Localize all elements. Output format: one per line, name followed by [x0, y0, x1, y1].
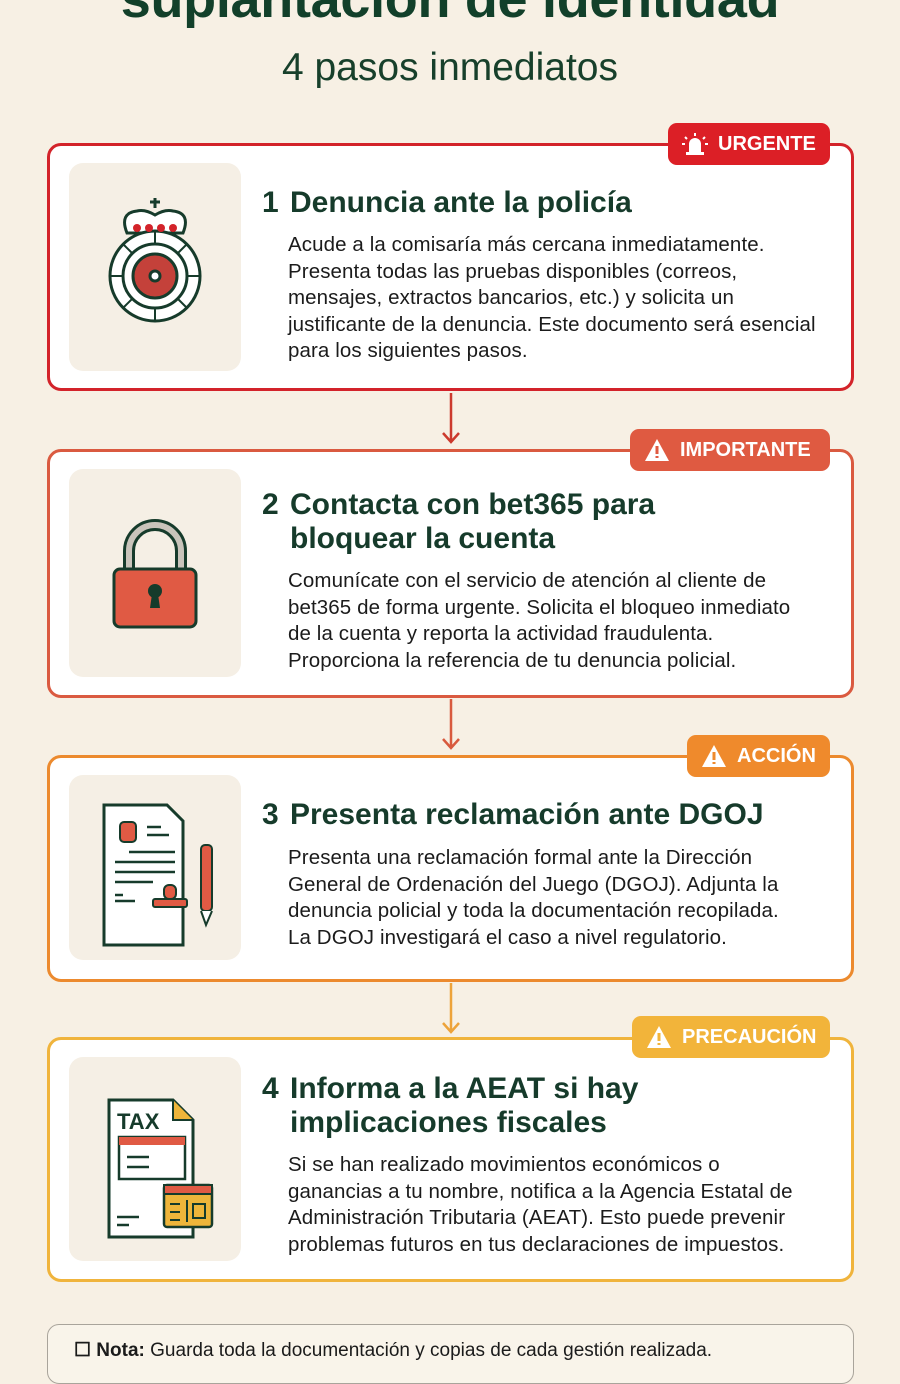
- badge: urgente: URGENTE: [718, 133, 816, 155]
- heading: 2: [262, 488, 279, 521]
- heading: implicaciones fiscales: [290, 1106, 607, 1139]
- heading: 4: [262, 1072, 279, 1105]
- panel: step 1: [47, 143, 854, 391]
- panel: step 3: [47, 755, 854, 982]
- badge: urgente: [668, 123, 830, 165]
- heading: bloquear la cuenta: [290, 522, 555, 555]
- heading: 1: [262, 186, 279, 219]
- body text: problemas futuros en tus declaraciones de impuestos.: [288, 1233, 784, 1256]
- body text: ganancias a tu nombre, notifica a la Agencia Estatal de: [288, 1180, 793, 1203]
- badge: precaucion: [632, 1016, 830, 1058]
- heading: 3: [262, 798, 279, 831]
- body text: [288, 233, 816, 362]
- body text: de la cuenta y reporta la actividad fraudulenta.: [288, 622, 713, 645]
- badge: accion: [687, 735, 830, 777]
- arrow 2: [442, 699, 460, 750]
- icon: document with stamp: [69, 775, 241, 960]
- body text: denuncia policial y toda la documentación recopilada.: [288, 899, 779, 922]
- body text: [288, 846, 779, 949]
- heading: [262, 488, 656, 555]
- icon: tax document: [69, 1057, 241, 1261]
- subtitle: 4 pasos inmediatos: [282, 46, 618, 89]
- body text: Acude a la comisaría más cercana inmediatamente.: [288, 233, 765, 256]
- body text: Comunícate con el servicio de atención al cliente de: [288, 569, 766, 592]
- panel: step 2: [47, 449, 854, 698]
- body text: Si se han realizado movimientos económicos o: [288, 1153, 720, 1176]
- icon: padlock: [69, 469, 241, 677]
- heading: Contacta con bet365 para: [290, 488, 655, 521]
- arrow 3: [442, 983, 460, 1034]
- body text: La DGOJ investigará el caso a nivel regulatorio.: [288, 926, 727, 949]
- icon: tax document: TAX: [117, 1109, 160, 1134]
- badge: importante: IMPORTANTE: [680, 439, 811, 461]
- heading: Denuncia ante la policía: [290, 186, 632, 219]
- badge: importante: [630, 429, 830, 471]
- body text: General de Ordenación del Juego (DGOJ). Adjunta la: [288, 873, 778, 896]
- body text: Proporciona la referencia de tu denuncia policial.: [288, 649, 736, 672]
- note box: [47, 1324, 854, 1384]
- heading: Informa a la AEAT si hay: [290, 1072, 638, 1105]
- badge: accion: ACCIÓN: [737, 745, 816, 767]
- body text: [288, 1153, 793, 1256]
- body text: mensajes, extractos bancarios, etc.) y solicita un: [288, 286, 734, 309]
- body text: Presenta una reclamación formal ante la Dirección: [288, 846, 752, 869]
- heading: Presenta reclamación ante DGOJ: [290, 798, 764, 831]
- heading: [262, 1072, 638, 1139]
- body text: [288, 569, 790, 672]
- body text: bet365 de forma urgente. Solicita el bloqueo inmediato: [288, 596, 790, 619]
- panel: step 4: [47, 1037, 854, 1282]
- body text: justificante de la denuncia. Este documento será esencial: [288, 313, 816, 336]
- body text: para los siguientes pasos.: [288, 339, 528, 362]
- badge: precaucion: PRECAUCIÓN: [682, 1026, 816, 1048]
- body text: Presenta todas las pruebas disponibles (correos,: [288, 260, 737, 283]
- arrow 1: [442, 393, 460, 444]
- body text: Administración Tributaria (AEAT). Esto puede prevenir: [288, 1206, 785, 1229]
- icon: police badge: [69, 163, 241, 371]
- note box: ☐ Nota: Guarda toda la documentación y copias de cada gestión realizada.: [74, 1340, 712, 1361]
